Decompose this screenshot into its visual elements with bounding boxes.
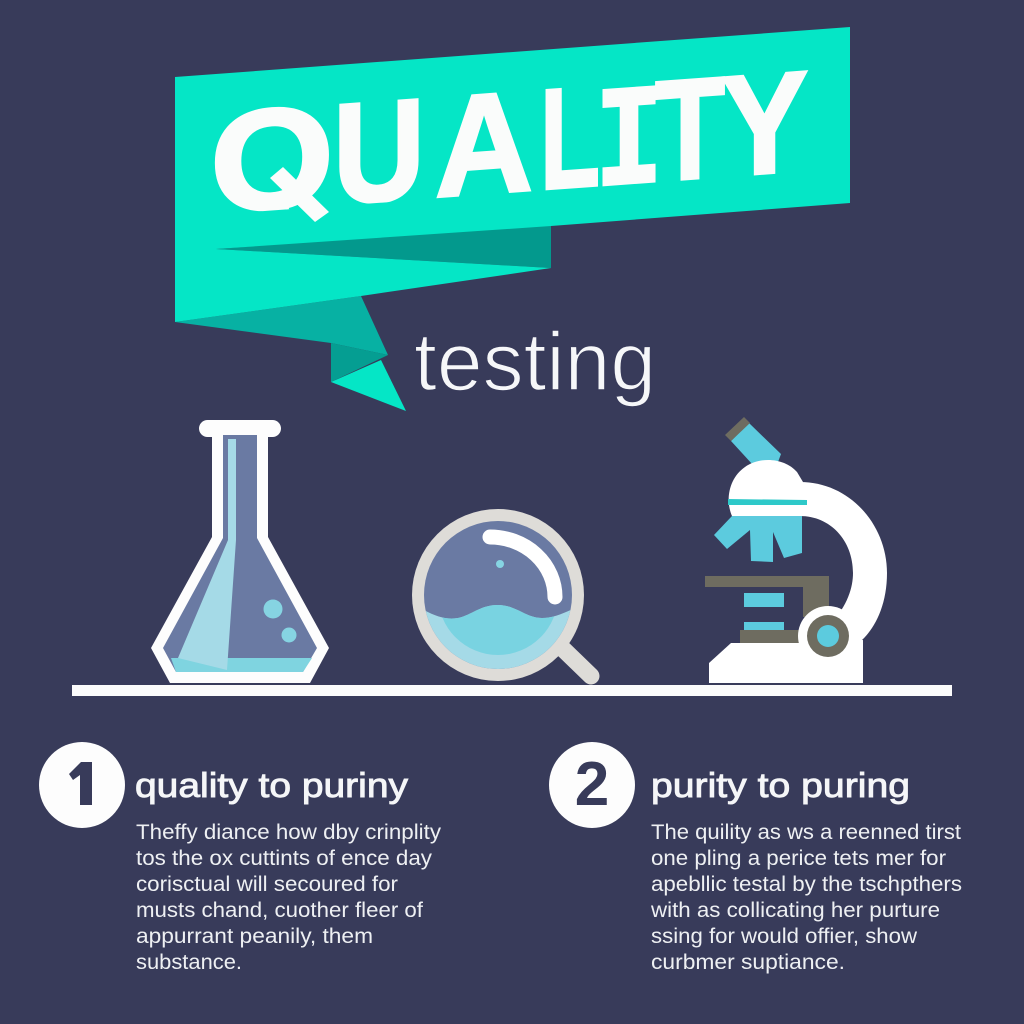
text block: step 2: curbmer suptiance. (651, 951, 845, 974)
icon: microscope (705, 417, 887, 683)
badge: number 2 (549, 742, 635, 828)
text block: step 1: appurrant peanily, them (136, 925, 373, 948)
text block: step 2 (650, 821, 962, 974)
text block: step 2: one pling a perice tets mer for (651, 847, 946, 870)
title: QUALITY: U (333, 69, 425, 235)
text block: step 1: corisctual will secoured for (136, 873, 398, 896)
text block: step 2: ssing for would offier, show (651, 925, 918, 948)
subtitle: testing: testing (414, 315, 656, 408)
text block: step 2: The quility as ws a reenned tirst (651, 821, 961, 844)
badge: number 2: 2 (575, 750, 609, 819)
title: QUALITY: T (655, 47, 725, 212)
panel: step 1 (39, 742, 442, 974)
shelf line (72, 685, 952, 696)
text block: step 2: apebllic testal by the tschpthers (651, 873, 962, 896)
title: QUALITY: A (435, 61, 533, 228)
title: QUALITY: I (595, 62, 663, 228)
badge: number 1: 1 (67, 750, 101, 819)
heading: step 1: quality to puriny (135, 767, 408, 805)
title: QUALITY: L (540, 56, 600, 220)
text block: step 1: tos the ox cuttints of ence day (136, 847, 433, 870)
title: QUALITY: Q (210, 75, 334, 244)
title: QUALITY: Y (721, 41, 808, 207)
banner ribbon (175, 27, 850, 411)
title: QUALITY (214, 70, 808, 222)
text block: step 1: Theffy diance how dby crinplity (136, 821, 442, 844)
text block: step 2: with as collicating her purture (650, 899, 940, 922)
badge: number 1 (39, 742, 125, 828)
icon: flask (151, 420, 329, 683)
heading: step 2: purity to puring (651, 767, 910, 805)
panel: step 2 (549, 742, 962, 974)
text block: step 1: musts chand, cuother fleer of (136, 899, 423, 922)
text block: step 1: substance. (136, 951, 242, 974)
icon: magnifying glass (412, 509, 591, 681)
text block: step 1 (136, 821, 442, 974)
